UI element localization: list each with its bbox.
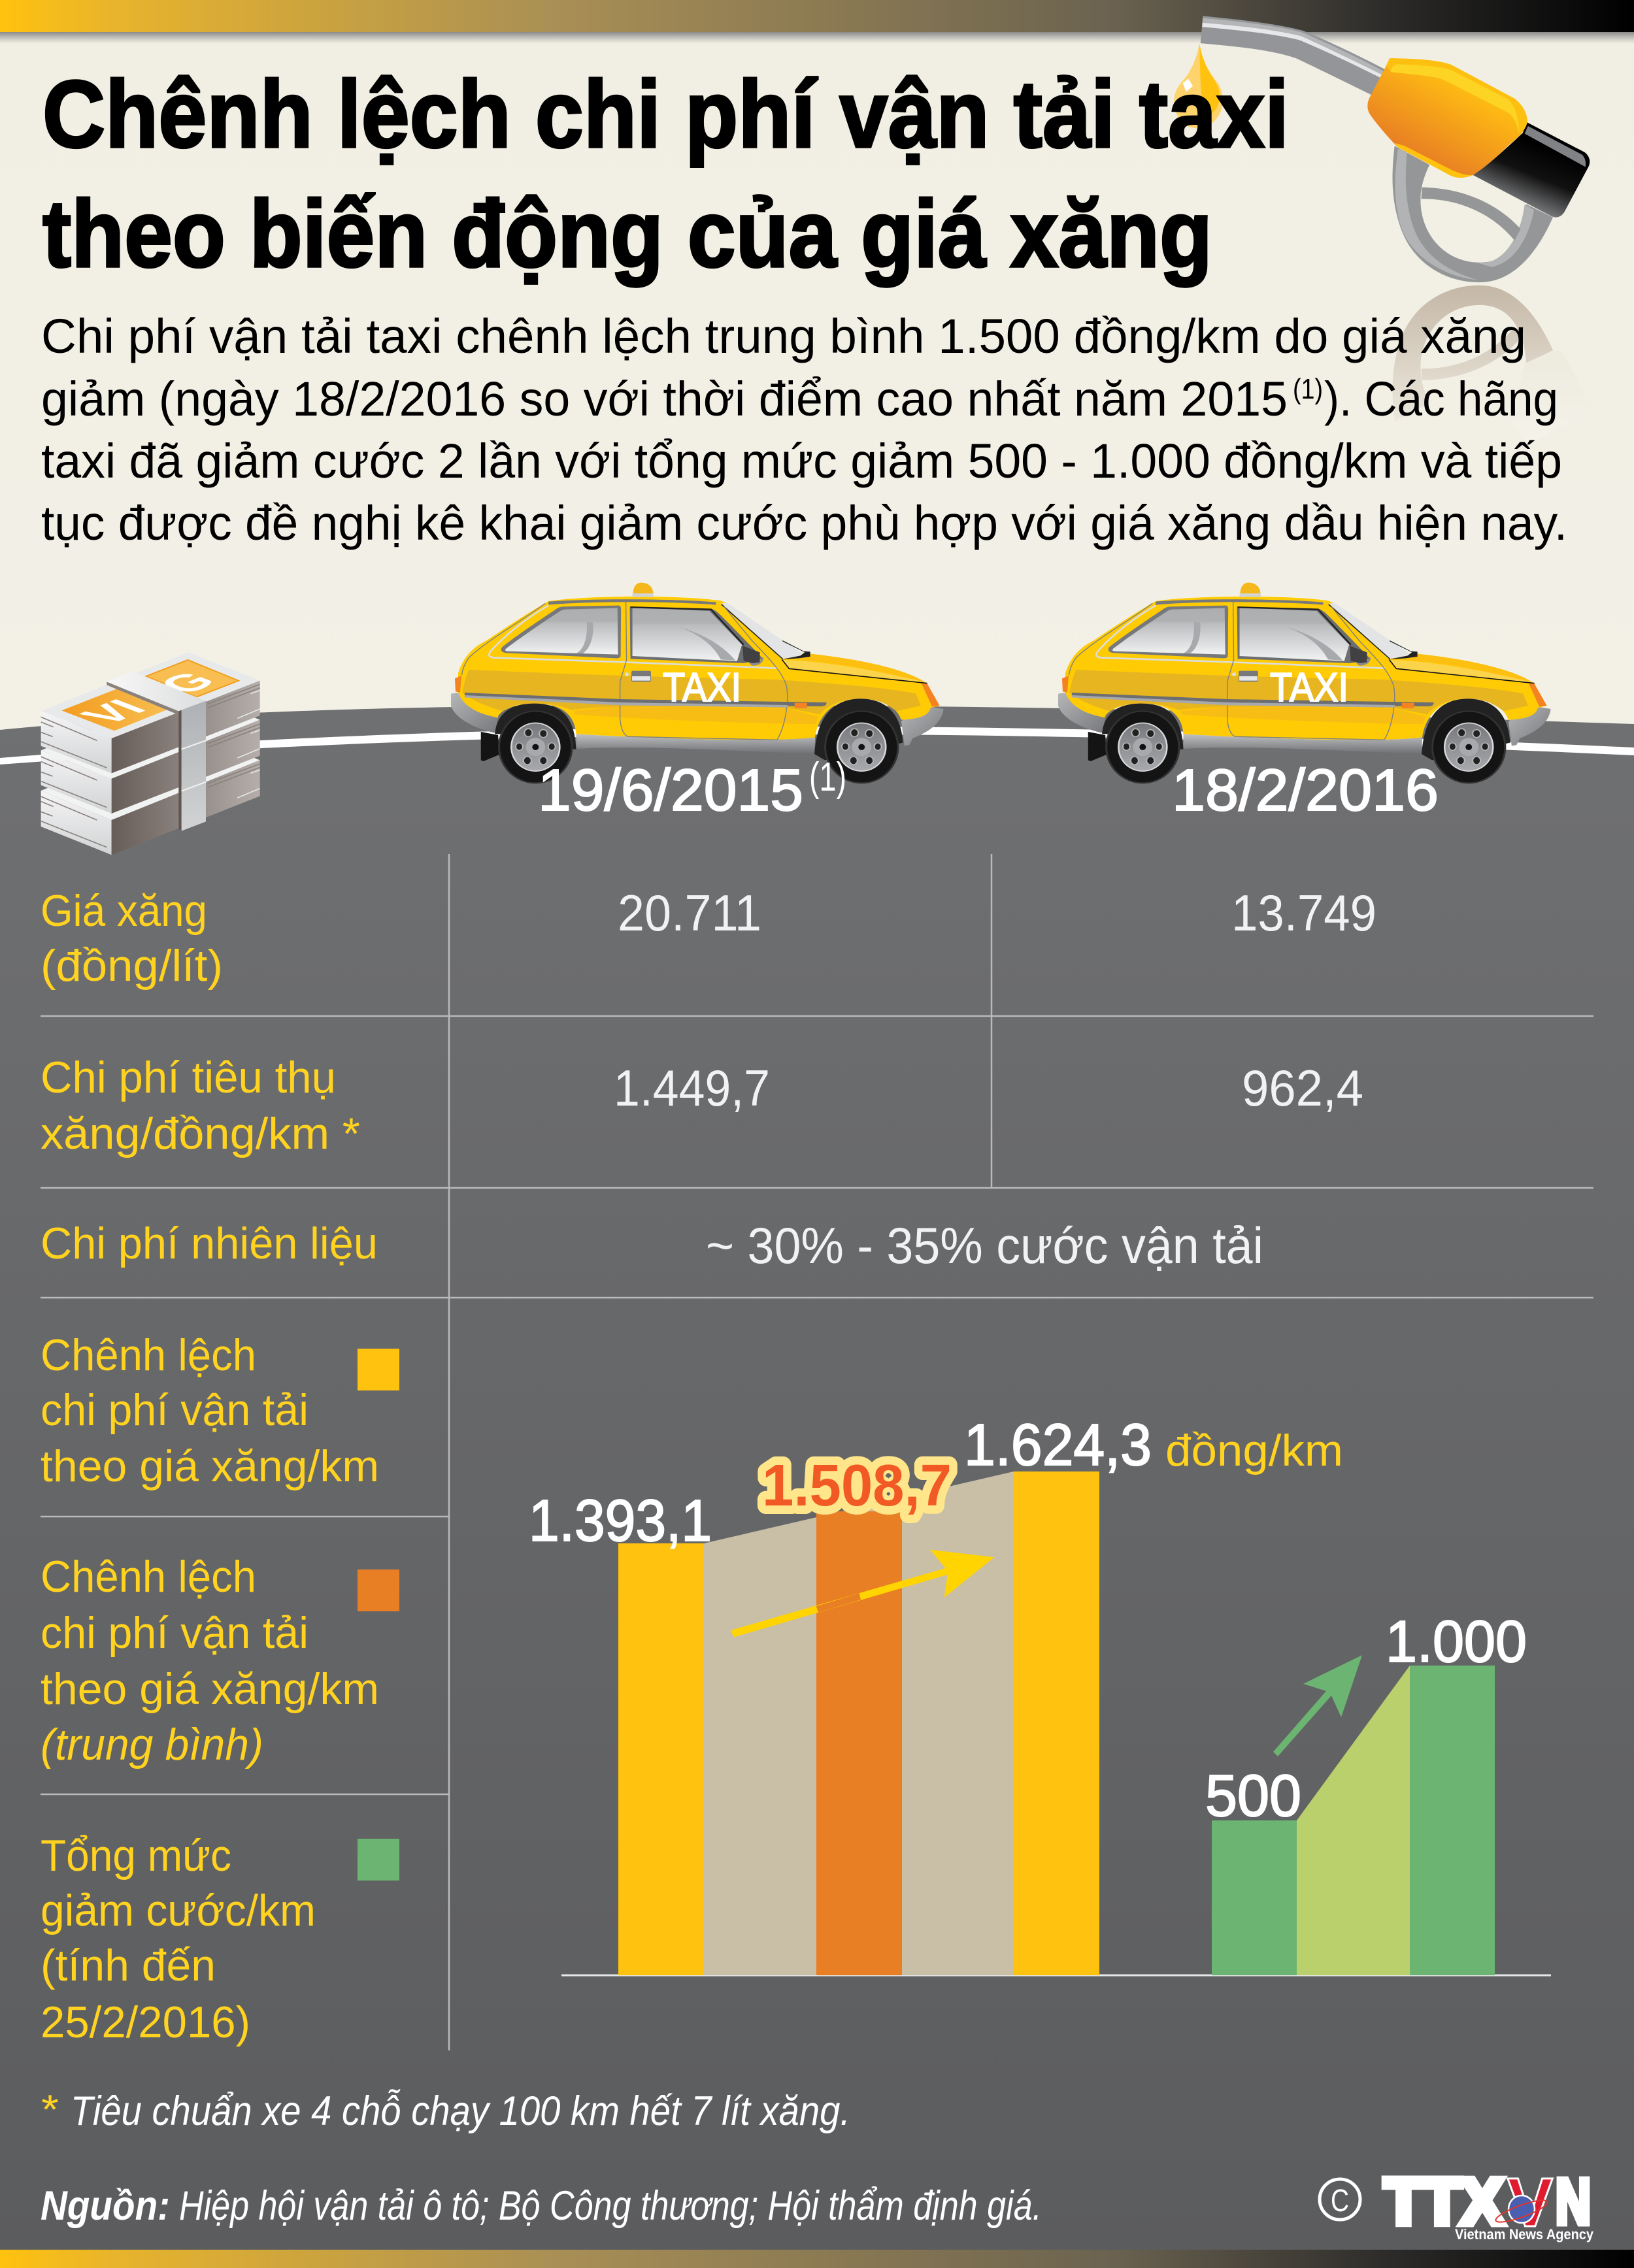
bar chart: fare reduction	[1205, 1609, 1527, 1975]
logo: TTXVN: N	[1556, 2165, 1591, 2237]
unit label: đồng/km	[1165, 1426, 1343, 1475]
table grid lines	[41, 854, 1593, 2050]
logo: TTXVN: TTX	[1384, 2165, 1503, 2237]
value 500: 500	[1205, 1764, 1301, 1829]
legend: tổng mức giảm cước: giảm cước/km	[41, 1886, 316, 1935]
taxi car: 18/2/2016	[1058, 583, 1551, 783]
row: chi phí nhiên liệu	[41, 1217, 1263, 1274]
row: chi phí tiêu thụ: xăng/đồng/km *	[41, 1109, 360, 1159]
title	[42, 61, 1289, 287]
title: Chênh lệch chi phí vận tải taxi	[42, 61, 1289, 167]
arrow: rising reduction	[1273, 1655, 1362, 1756]
intro paragraph: ). Các hãng	[1324, 372, 1558, 426]
logo: TTXVN	[1384, 2164, 1594, 2243]
arrow: rising cost	[731, 1550, 994, 1637]
car door label: TAXI	[1270, 665, 1348, 710]
date heading 2015: 19/6/2015	[538, 758, 803, 823]
row: chi phí tiêu thụ	[41, 1053, 1363, 1159]
intro paragraph	[41, 309, 1567, 550]
date heading 2016: 18/2/2016	[1172, 758, 1439, 823]
row: chi phí tiêu thụ: 1.449,7	[614, 1059, 770, 1117]
legend: chênh lệch theo giá xăng: Chênh lệch	[41, 1330, 256, 1380]
banknote label VI: VI	[70, 695, 158, 729]
title: theo biến động của giá xăng	[42, 180, 1212, 287]
taxi car: 19/6/2015	[451, 583, 944, 783]
footnote: *	[41, 2087, 59, 2133]
legend: tổng mức giảm cước	[41, 1831, 399, 2047]
legend: chênh lệch trung bình: chi phí vận tải	[41, 1608, 308, 1658]
legend: chênh lệch theo giá xăng: chi phí vận tải	[41, 1385, 308, 1435]
date heading 2015: (1)	[809, 755, 846, 800]
bar chart: fuel cost difference	[529, 1413, 1343, 1975]
row: chi phí tiêu thụ: Chi phí tiêu thụ	[41, 1053, 336, 1102]
chart axis	[561, 1975, 1551, 1976]
row: giá xăng: Giá xăng	[41, 886, 207, 936]
source line: Nguồn:	[41, 2183, 170, 2229]
intro paragraph: giảm (ngày 18/2/2016 so với thời điểm cao nhất năm 2015	[41, 372, 1288, 426]
row: chi phí tiêu thụ: 962,4	[1242, 1059, 1363, 1117]
icon: fuel drop	[1174, 43, 1223, 128]
legend: tổng mức giảm cước: Tổng mức	[41, 1831, 231, 1881]
icon: fuel nozzle reflection	[1392, 286, 1590, 445]
legend: chênh lệch theo giá xăng: theo giá xăng/km	[41, 1441, 379, 1491]
row: giá xăng: 20.711	[618, 884, 761, 942]
legend: chênh lệch trung bình	[41, 1552, 399, 1769]
value 1.393,1: 1.393,1	[529, 1488, 712, 1554]
stacked banknote bundles	[41, 652, 260, 855]
value 1.508,7: 1.508,7	[762, 1453, 952, 1519]
source line: Hiệp hội vận tải ô tô; Bộ Công thương; Hội thẩm định giá.	[179, 2183, 1042, 2229]
legend: chênh lệch trung bình: theo giá xăng/km	[41, 1664, 379, 1714]
intro paragraph: taxi đã giảm cước 2 lần với tổng mức giảm 500 - 1.000 đồng/km và tiếp	[41, 434, 1562, 488]
legend: chênh lệch trung bình: (trung bình)	[41, 1720, 263, 1769]
value 1.508,7: 1.508,7	[762, 1453, 952, 1519]
logo: TTXVN: Vietnam News Agency	[1455, 2226, 1594, 2243]
intro paragraph: tục được đề nghị kê khai giảm cước phù hợp với giá xăng dầu hiện nay.	[41, 496, 1567, 550]
legend: chênh lệch theo giá xăng	[41, 1330, 399, 1491]
banknote label G: G	[147, 667, 227, 698]
legend: tổng mức giảm cước: (tính đến	[41, 1941, 216, 1990]
legend: chênh lệch trung bình: Chênh lệch	[41, 1552, 256, 1602]
intro paragraph: (1)	[1293, 373, 1323, 405]
road background	[0, 705, 1634, 2268]
intro paragraph: Chi phí vận tải taxi chênh lệch trung bình 1.500 đồng/km do giá xăng	[41, 309, 1526, 363]
icon: fuel nozzle	[1201, 16, 1590, 282]
row: chi phí nhiên liệu: Chi phí nhiên liệu	[41, 1219, 378, 1268]
row: giá xăng: (đồng/lít)	[41, 941, 223, 991]
legend: tổng mức giảm cước: 25/2/2016)	[41, 1997, 250, 2047]
copyright symbol	[1320, 2179, 1360, 2220]
row: giá xăng: 13.749	[1231, 884, 1376, 942]
row: giá xăng	[41, 884, 1376, 991]
car door label: TAXI	[663, 665, 741, 710]
value 1.624,3: 1.624,3	[964, 1413, 1152, 1478]
row: chi phí nhiên liệu: ~ 30% - 35% cước vận tải	[706, 1217, 1263, 1274]
value 1.000: 1.000	[1386, 1609, 1527, 1675]
top gradient bar	[0, 0, 1634, 44]
copyright symbol: C	[1331, 2184, 1349, 2218]
icon: money stack	[41, 652, 260, 855]
logo: TTXVN: V	[1507, 2164, 1553, 2241]
footnote: Tiêu chuẩn xe 4 chỗ chạy 100 km hết 7 lít xăng.	[71, 2088, 850, 2134]
paper band	[107, 672, 206, 831]
bottom gradient bar	[0, 2250, 1634, 2268]
